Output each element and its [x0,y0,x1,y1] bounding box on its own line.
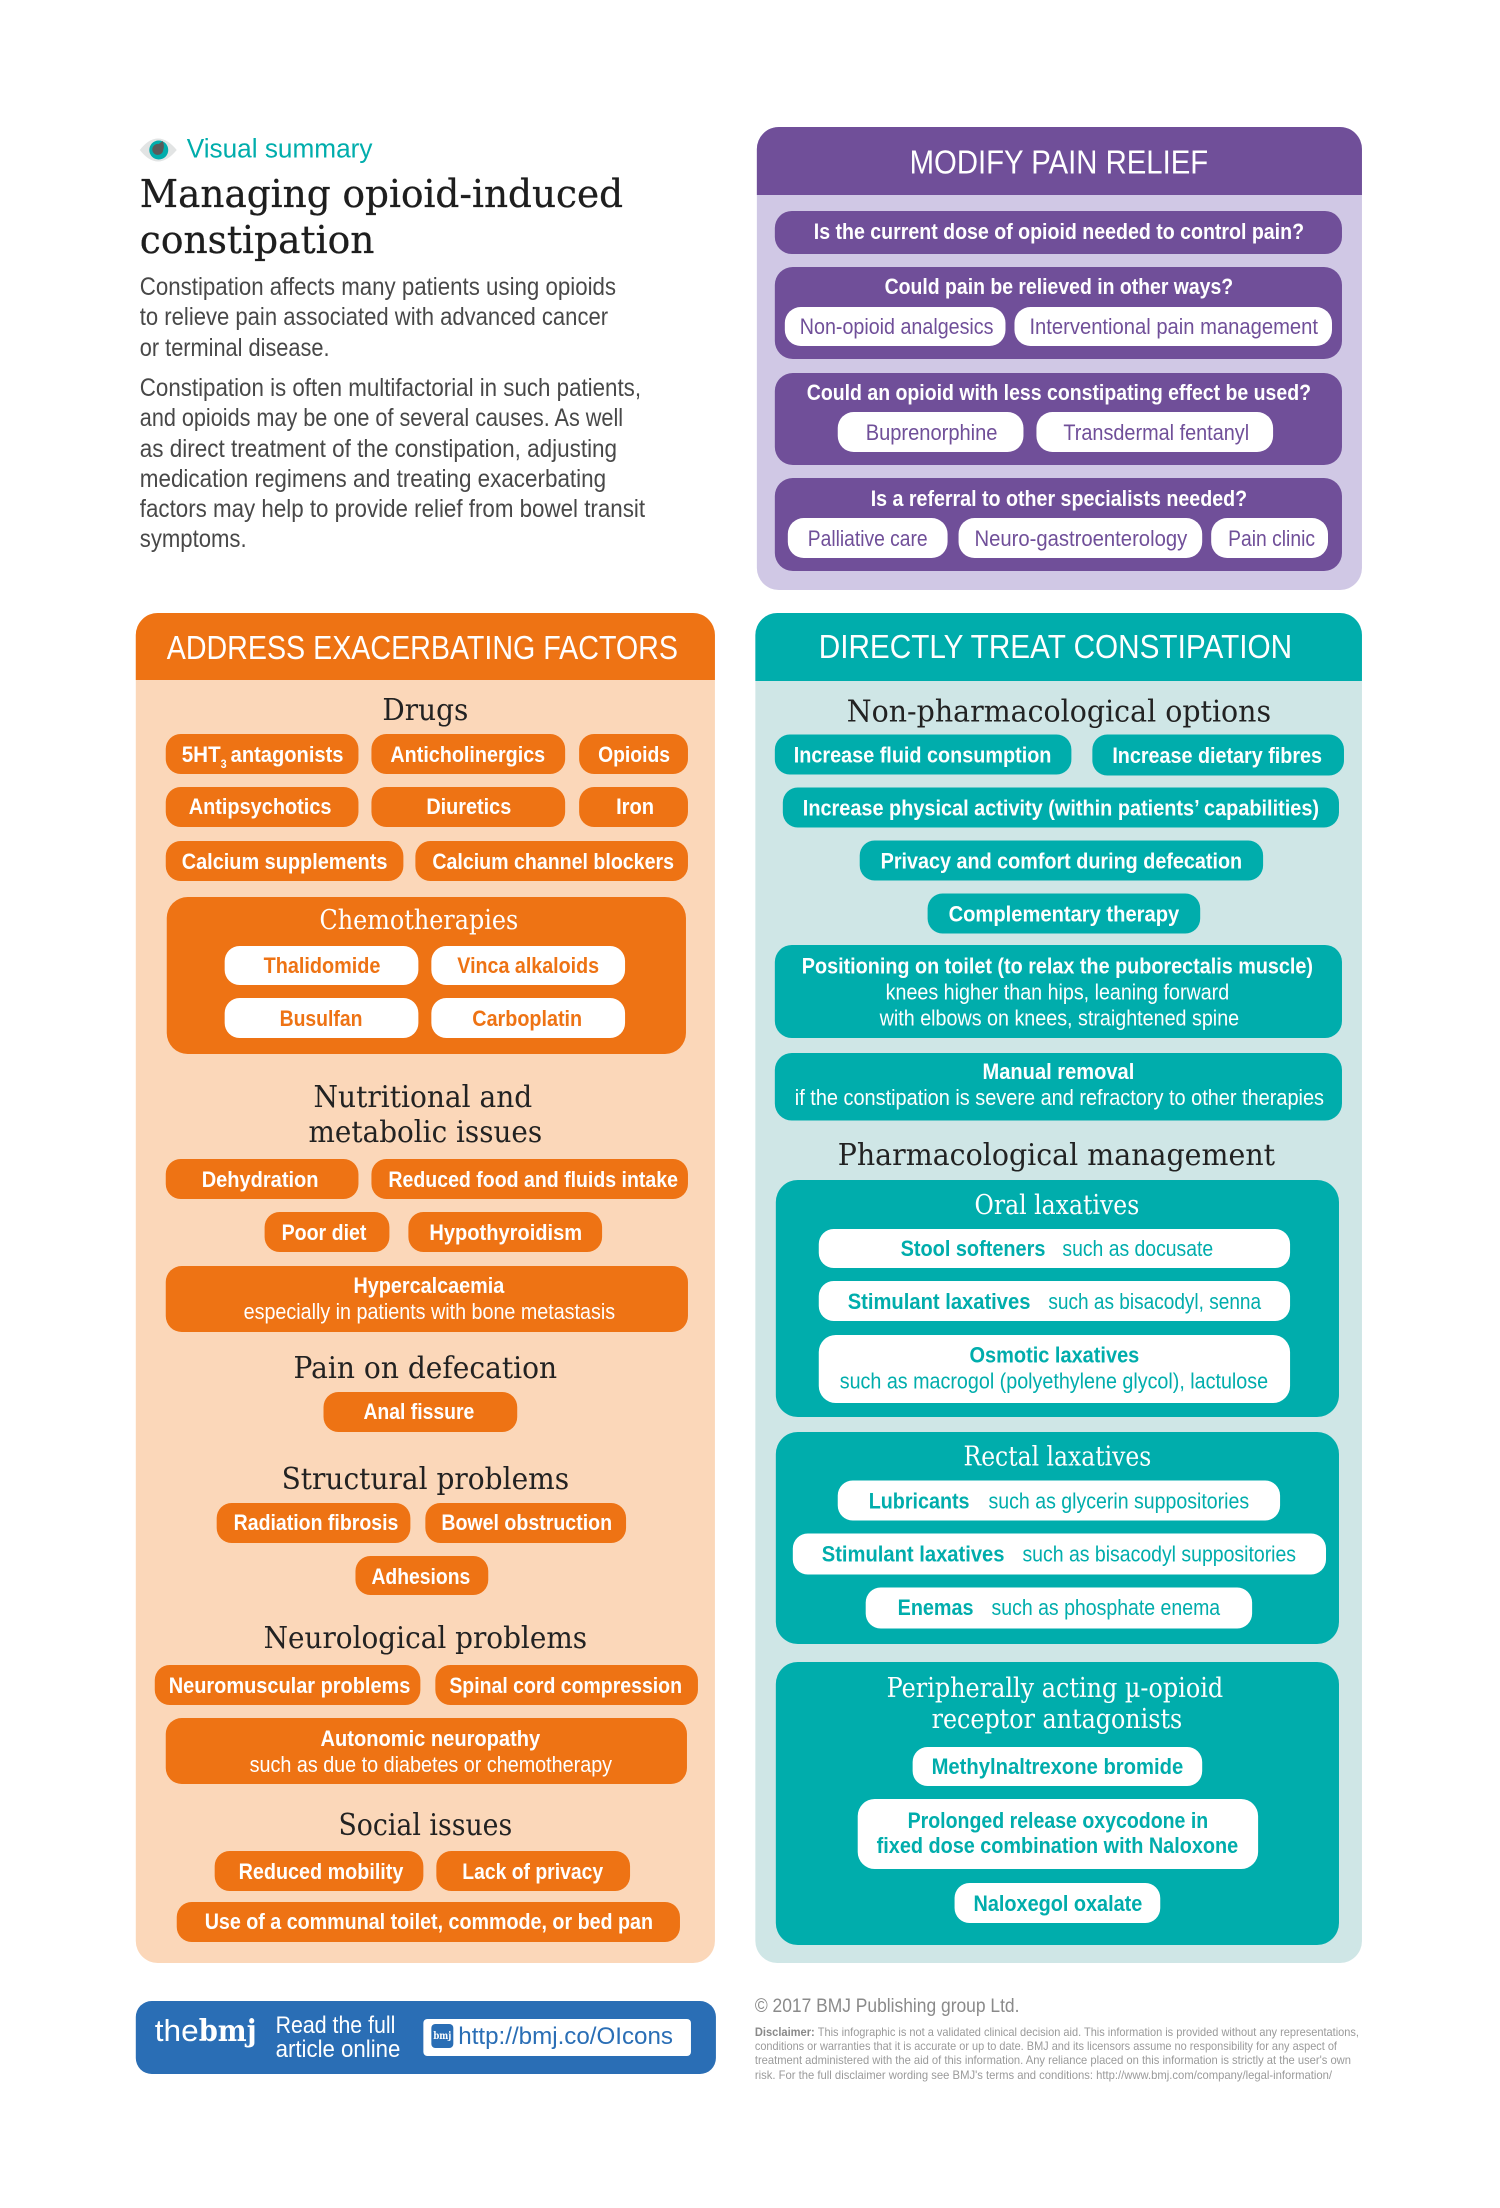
heading: non-pharmacological options: Non-pharmacological options [847,694,1271,730]
question: relieved in other ways: Interventional pain management [1029,314,1318,339]
title [140,172,623,262]
drug pills: Diuretics [426,794,511,819]
box: peripherally acting antagonists: Naloxegol oxalate [974,1891,1142,1916]
neurological pills: such as due to diabetes or chemotherapy [250,1752,612,1777]
box: chemotherapies [167,897,686,1054]
box: peripherally acting antagonists [776,1662,1339,1945]
drug pills: Calcium supplements [182,849,387,874]
intro block [140,133,645,553]
question: referral [775,478,1342,571]
nutritional pills: Dehydration [202,1167,319,1192]
disclaimer: risk. For the full disclaimer wording see BMJ's terms and conditions: http://www.bmj.com/company/legal-information/ [755,2068,1333,2082]
drug pills: Anticholinergics [390,742,545,767]
heading: nutritional and metabolic issues [309,1080,542,1150]
social pills [177,1851,680,1942]
nutritional pills: Hypercalcaemia [353,1273,505,1298]
logo: the bmj: the [155,2013,199,2048]
heading: drugs: Drugs [382,693,468,728]
header: modify pain relief: MODIFY PAIN RELIEF [910,143,1208,181]
box: peripherally acting antagonists: Methylnaltrexone bromide [932,1754,1183,1779]
non-pharmacological pills: Privacy and comfort during defecation [881,848,1242,874]
disclaimer: This infographic is not a validated clinical decision aid. This information is provided without any representations, [818,2025,1359,2039]
box: rectal laxatives: such as bisacodyl suppositories [1022,1541,1296,1567]
text: read the full article online: Read the full [276,2012,395,2039]
panel: directly treat constipation [755,613,1362,1963]
drug pills: 3 [221,757,227,771]
title: constipation [140,218,374,262]
intro paragraph 2 [140,374,645,553]
nutritional pills: Hypothyroidism [429,1220,582,1245]
copyright: © 2017 BMJ Publishing group Ltd. [755,1996,1019,2017]
box: rectal laxatives: Stimulant laxatives [822,1541,1004,1567]
drug pills: Antipsychotics [189,794,332,819]
neurological pills: Spinal cord compression [449,1673,682,1698]
drug pills: 5HT [182,742,221,767]
box: oral laxatives: Oral laxatives [975,1190,1139,1221]
question: less constipating opioid [775,373,1342,465]
heading: pharmacological management: Pharmacological management [838,1138,1275,1173]
non-pharmacological pills: with elbows on knees, straightened spine [879,1005,1239,1031]
box: peripherally acting antagonists: receptor antagonists [932,1704,1182,1735]
header: directly treat constipation [755,613,1362,681]
intro paragraph 2: symptoms. [140,525,247,553]
link box [423,2019,691,2056]
text: read the full article online: article online [276,2036,400,2063]
box: rectal laxatives: Enemas [898,1595,974,1620]
nutritional pills: Reduced food and fluids intake [388,1167,678,1192]
box: oral laxatives: Stimulant laxatives [848,1289,1030,1314]
structural pills [217,1503,626,1595]
logo: the bmj: bmj [199,2014,257,2049]
structural pills: Adhesions [371,1564,470,1589]
heading: structural problems: Structural problems [282,1462,569,1497]
social pills: Lack of privacy [462,1859,604,1884]
question: relieved in other ways: Could pain be relieved in other ways? [885,274,1233,299]
box: rectal laxatives: Lubricants [869,1488,970,1514]
header: modify pain relief [757,127,1362,195]
heading: pain on defecation: Pain on defecation [294,1351,557,1386]
title: Managing opioid-induced [140,172,623,216]
link box: bmj [433,2031,451,2042]
disclaimer: treatment administered with the aid of this information. Any reliance placed on this information is strictly at the user's own [755,2053,1351,2067]
heading: neurological problems: Neurological problems [264,1621,587,1656]
question: less constipating opioid: Could an opioid with less constipating effect be used? [807,380,1311,405]
question: referral: Pain clinic [1228,526,1315,551]
question: relieved in other ways [775,267,1342,359]
disclaimer: conditions or warranties that it is accurate or up to date. BMJ and its licensors assume no responsibility for any aspect of [755,2039,1338,2053]
non-pharmacological pills: if the constipation is severe and refractory to other therapies [795,1085,1324,1110]
box: oral laxatives: such as docusate [1062,1236,1213,1261]
neurological pills [155,1665,698,1784]
drug pills: Opioids [598,742,670,767]
question: referral: Is a referral to other specialists needed? [871,486,1247,511]
non-pharmacological pills: Positioning on toilet (to relax the puborectalis muscle) [802,953,1313,979]
box: rectal laxatives: Rectal laxatives [964,1441,1151,1473]
non-pharmacological pills: knees higher than hips, leaning forward [886,979,1229,1005]
social pills: Use of a communal toilet, commode, or bed pan [205,1909,653,1934]
logo: the bmj [155,2013,257,2049]
question: less constipating opioid: Transdermal fentanyl [1063,420,1249,445]
drug pills [166,734,688,881]
question: current dose: Is the current dose of opioid needed to control pain? [814,219,1304,244]
question: referral: Neuro-gastroenterology [975,526,1187,551]
intro paragraph 2: medication regimens and treating exacerbating [140,465,606,493]
question: referral: Palliative care [808,526,928,551]
neurological pills: Neuromuscular problems [169,1673,410,1698]
heading: nutritional and metabolic issues: Nutritional and [314,1080,532,1115]
non-pharmacological pills [775,734,1344,1120]
box: chemotherapies: Vinca alkaloids [457,953,599,978]
header: directly treat constipation: DIRECTLY TREAT CONSTIPATION [819,628,1292,665]
question: relieved in other ways: Non-opioid analgesics [800,314,994,339]
footer: bmj link [136,2001,716,2074]
text: read the full article online [276,2012,400,2063]
nutritional pills: especially in patients with bone metastasis [244,1299,615,1324]
box: rectal laxatives: such as glycerin suppositories [989,1488,1249,1514]
question: less constipating opioid: Buprenorphine [866,420,998,445]
neurological pills: Autonomic neuropathy [321,1726,541,1751]
intro paragraph 1: to relieve pain associated with advanced cancer [140,303,608,331]
pill: anal fissure [324,1392,517,1432]
box: rectal laxatives [776,1432,1339,1644]
panel: modify pain relief [757,127,1362,590]
heading: nutritional and metabolic issues: metabolic issues [309,1115,542,1150]
box: chemotherapies: Busulfan [280,1006,362,1031]
intro paragraph 2: and opioids may be one of several causes. As well [140,404,623,432]
non-pharmacological pills: Manual removal [983,1059,1134,1084]
disclaimer [755,2025,1359,2082]
intro paragraph 1 [140,273,616,362]
intro paragraph 2: Constipation is often multifactorial in such patients, [140,374,641,402]
box: chemotherapies: Thalidomide [264,953,380,978]
icon: eye [140,138,177,162]
box: oral laxatives: such as bisacodyl, senna [1048,1289,1262,1314]
label: visual summary: Visual summary [187,133,373,164]
non-pharmacological pills: Complementary therapy [949,901,1180,927]
nutritional pills [166,1159,688,1332]
intro paragraph 1: Constipation affects many patients using opioids [140,273,616,301]
nutritional pills: Poor diet [282,1220,367,1245]
box: peripherally acting antagonists: fixed dose combination with Naloxone [877,1833,1238,1858]
box: peripherally acting antagonists: Prolonged release oxycodone in [908,1808,1208,1833]
panel: address exacerbating factors [136,613,715,1963]
non-pharmacological pills: Increase fluid consumption [794,742,1051,768]
box: peripherally acting antagonists: Peripherally acting µ-opioid [887,1673,1223,1704]
intro paragraph 1: or terminal disease. [140,334,330,362]
heading: social issues: Social issues [338,1808,512,1843]
intro paragraph 2: factors may help to provide relief from bowel transit [140,495,645,523]
non-pharmacological pills: Increase dietary fibres [1112,743,1322,768]
box: oral laxatives: Osmotic laxatives [970,1342,1139,1368]
structural pills: Bowel obstruction [441,1510,612,1535]
drug pills: Iron [616,794,654,819]
drug pills: Calcium channel blockers [432,849,674,874]
disclaimer: Disclaimer: [755,2025,815,2039]
intro paragraph 2: as direct treatment of the constipation, adjusting [140,435,617,463]
box: rectal laxatives: such as phosphate enema [992,1595,1221,1620]
header: address exacerbating factors: ADDRESS EXACERBATING FACTORS [167,629,678,666]
box: chemotherapies: Chemotherapies [320,905,518,936]
box: oral laxatives: Stool softeners [901,1236,1045,1261]
drug pills: antagonists [231,742,343,767]
link box: http://bmj.co/OIcons [458,2023,673,2050]
structural pills: Radiation fibrosis [234,1510,398,1535]
non-pharmacological pills: Increase physical activity (within patients’ capabilities) [803,795,1319,821]
box: oral laxatives: such as macrogol (polyethylene glycol), lactulose [840,1368,1268,1394]
header: address exacerbating factors [136,613,715,680]
box: oral laxatives [776,1180,1339,1417]
box: chemotherapies: Carboplatin [472,1006,582,1031]
question: current dose [775,211,1342,254]
pill: anal fissure: Anal fissure [363,1399,474,1424]
social pills: Reduced mobility [239,1859,404,1884]
